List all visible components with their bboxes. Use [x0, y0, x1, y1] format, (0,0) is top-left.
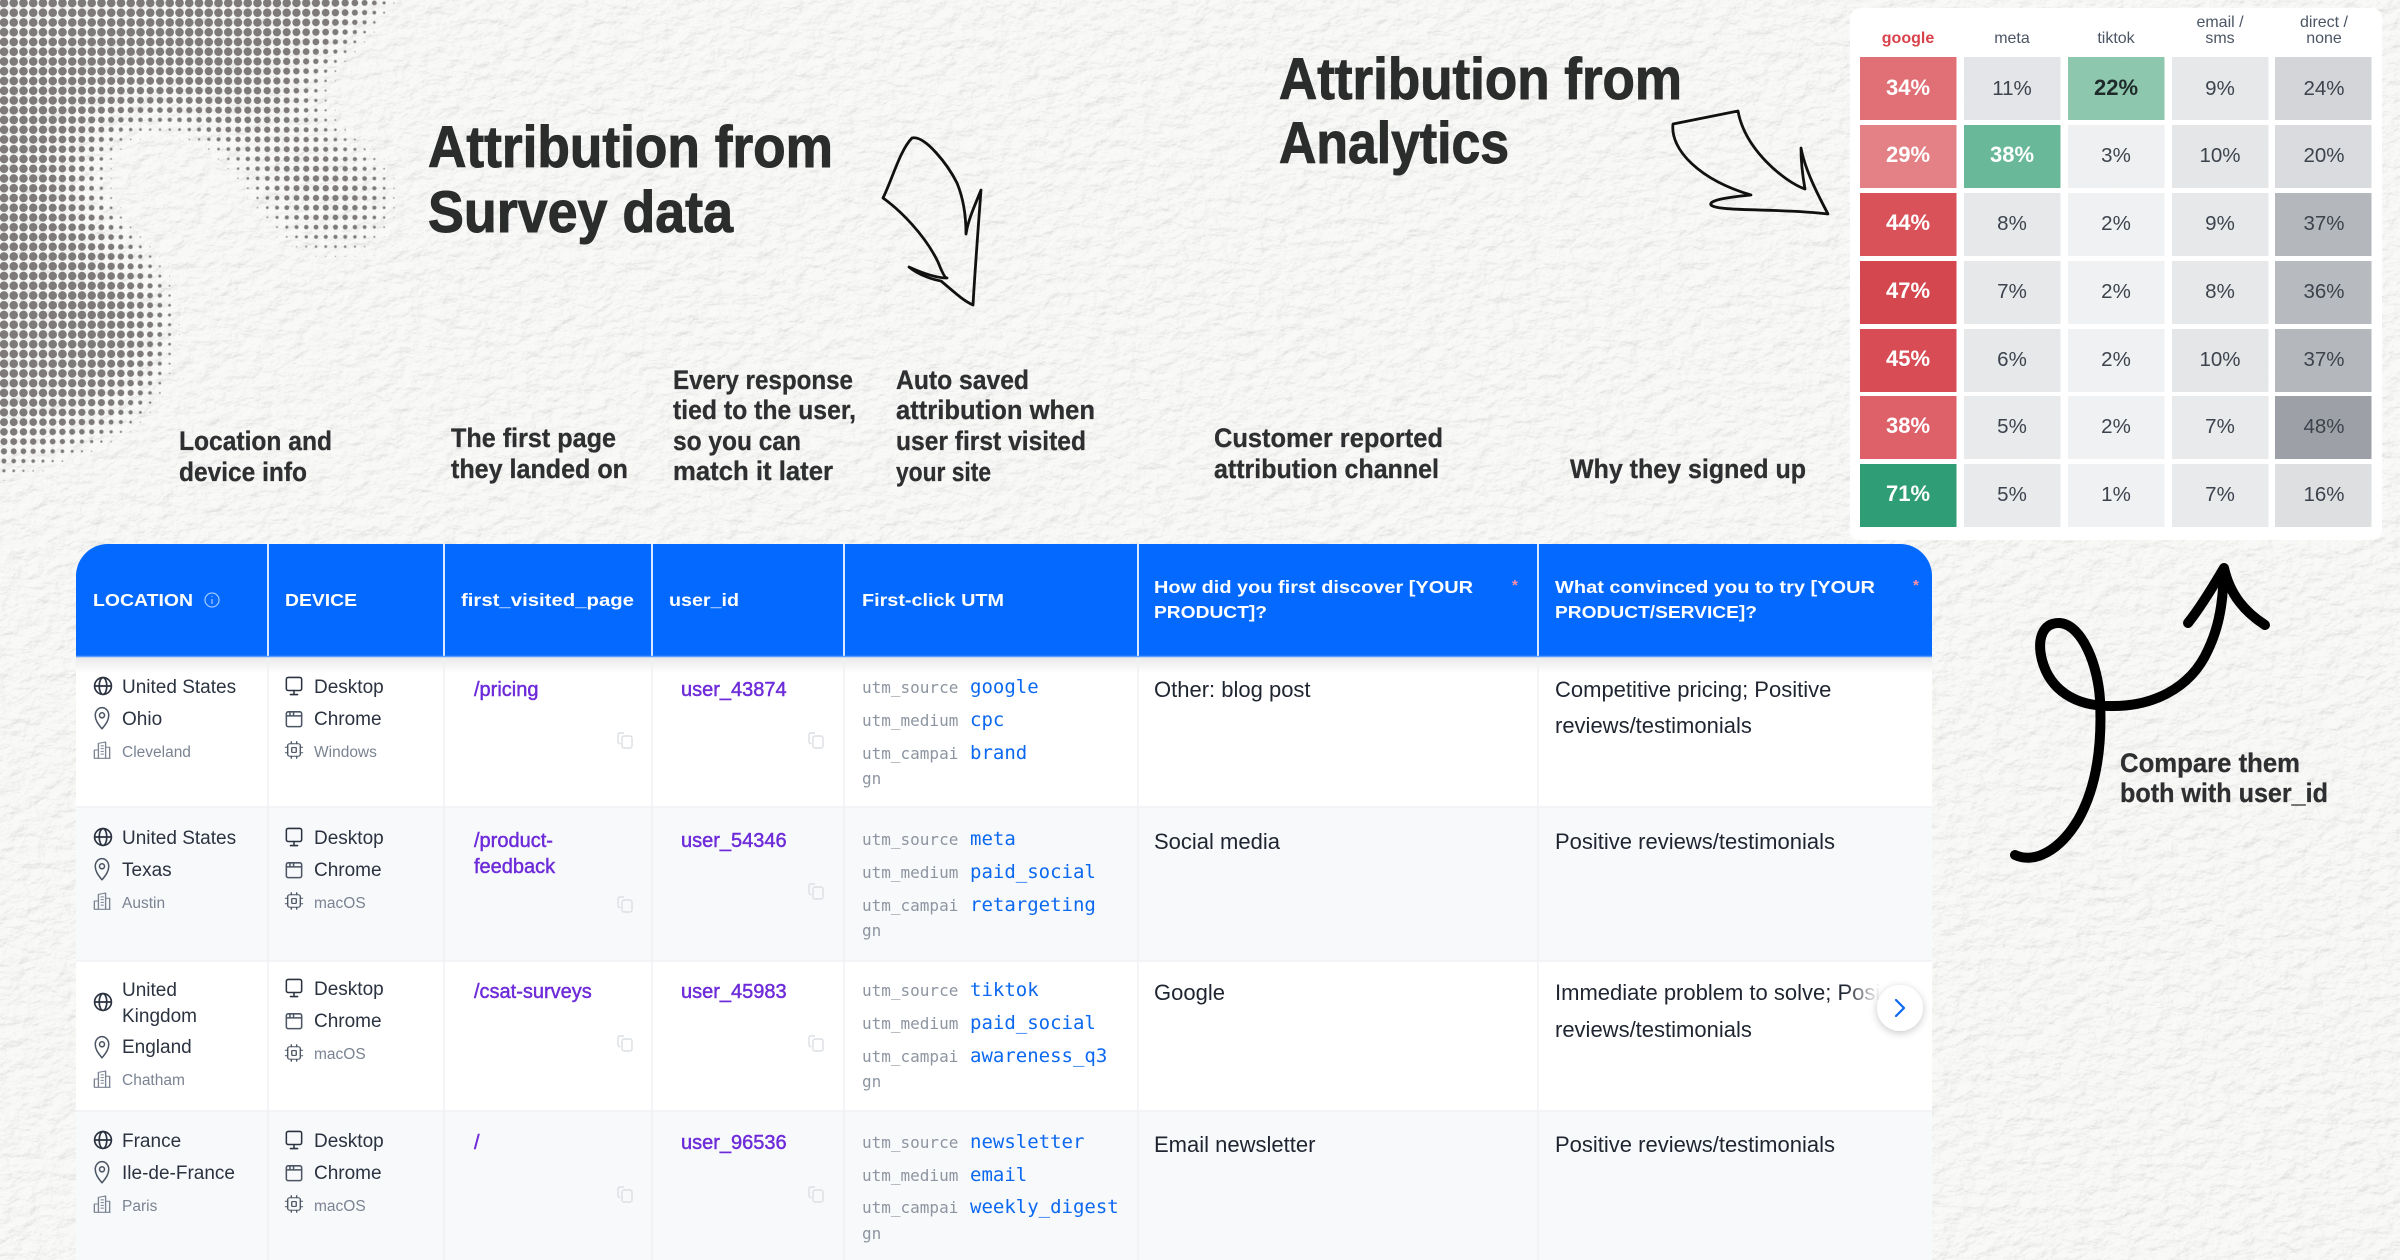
annotation: auto saved attribution: attribution when	[896, 395, 1095, 425]
location cell: Cleveland	[122, 744, 191, 761]
utm cell: awareness_q3	[970, 1045, 1107, 1067]
device cell: Desktop	[314, 979, 384, 1000]
icon: info	[205, 593, 219, 607]
survey answers	[1154, 677, 1831, 738]
location cell: Ohio	[122, 709, 162, 730]
title: Attribution from Survey data: Survey data	[428, 180, 734, 245]
panel: attribution heatmap	[1850, 8, 2382, 540]
location cell: Chatham	[122, 1072, 185, 1089]
location cell: Texas	[122, 860, 172, 881]
first visited page cell	[474, 830, 632, 912]
scroll button	[1846, 975, 1932, 1031]
location cell: Paris	[122, 1198, 158, 1215]
table header: first_visited_page	[461, 590, 634, 610]
utm cell: retargeting	[970, 894, 1096, 916]
utm cell: utm_source	[862, 830, 958, 849]
user id cell: user_45983	[681, 981, 787, 1003]
heatmap cells: 38%	[1886, 413, 1930, 438]
utm cell: utm_source	[862, 1133, 958, 1152]
annotation: user id: Every response	[673, 365, 853, 395]
table rows background	[76, 657, 1932, 1260]
title: Attribution from Analytics: Analytics	[1279, 111, 1509, 176]
user id cell	[681, 1132, 823, 1202]
survey answers	[1154, 829, 1835, 854]
annotation: user id: match it later	[673, 456, 833, 486]
utm cell	[862, 676, 1039, 788]
utm cell: utm_campai	[862, 744, 958, 763]
survey answers: Google	[1154, 980, 1225, 1005]
survey answers	[1154, 980, 1914, 1042]
survey answers: Social media	[1154, 829, 1281, 854]
utm cell: utm_campai	[862, 1198, 958, 1217]
utm cell: utm_campai	[862, 1047, 958, 1066]
device cell	[285, 828, 384, 912]
heatmap cells: 1%	[2101, 483, 2131, 506]
device cell: Desktop	[314, 828, 384, 849]
heatmap cells: 44%	[1886, 210, 1930, 235]
first visited page cell	[474, 981, 632, 1051]
utm cell: weekly_digest	[970, 1196, 1119, 1218]
location cell: Ile-de-France	[122, 1163, 235, 1184]
location cell	[94, 980, 197, 1089]
survey answers: Email newsletter	[1154, 1132, 1315, 1157]
device cell: macOS	[314, 1046, 366, 1063]
annotation: first page: The first page	[451, 423, 616, 453]
heatmap cells: 16%	[2303, 483, 2345, 506]
heatmap cells: 34%	[1886, 75, 1930, 100]
arrow: survey title to table	[883, 138, 981, 305]
survey answers: Other: blog post	[1154, 677, 1311, 702]
heatmap cells: 24%	[2303, 77, 2345, 100]
heatmap cells: 5%	[1997, 483, 2027, 506]
user id cell: user_96536	[681, 1132, 787, 1154]
heatmap column headers: google	[1882, 30, 1934, 47]
location cell: Kingdom	[122, 1006, 197, 1027]
table header: user_id	[669, 590, 739, 610]
heatmap cells: 5%	[1997, 415, 2027, 438]
table header: What convinced you to try [YOUR	[1555, 577, 1875, 597]
user id cell: user_43874	[681, 679, 787, 701]
utm cell: utm_medium	[862, 863, 958, 882]
annotation: location and device: Location and	[179, 426, 332, 456]
table header: DEVICE	[285, 590, 357, 610]
heatmap column headers: email /	[2196, 14, 2244, 31]
annotation: compare with user_id: Compare them	[2120, 748, 2300, 778]
device cell: Desktop	[314, 1131, 384, 1152]
heatmap cells: 9%	[2205, 77, 2235, 100]
utm cell: gn	[862, 1072, 881, 1091]
utm cell: tiktok	[970, 979, 1039, 1001]
first visited page cell: /product-	[474, 830, 553, 852]
column annotations	[179, 365, 1806, 487]
location cell: United	[122, 980, 177, 1001]
heatmap cells: 7%	[2205, 483, 2235, 506]
device cell: macOS	[314, 1198, 366, 1215]
heatmap cells: 2%	[2101, 348, 2131, 371]
location cell: England	[122, 1037, 192, 1058]
user id cell	[681, 679, 823, 748]
annotation: location and device: device info	[179, 457, 307, 487]
utm cell	[862, 979, 1107, 1091]
table header: *	[1512, 577, 1518, 594]
device cell: Windows	[314, 744, 377, 761]
utm cell: google	[970, 676, 1039, 698]
utm cell: meta	[970, 828, 1016, 850]
location cell: France	[122, 1131, 181, 1152]
heatmap cells: 37%	[2303, 348, 2345, 371]
annotation: customer reported: Customer reported	[1214, 423, 1443, 453]
annotation: auto saved attribution: your site	[896, 457, 991, 487]
location cell: United States	[122, 677, 236, 698]
heatmap column headers	[1882, 14, 2349, 47]
table header: PRODUCT]?	[1154, 602, 1267, 622]
annotation: user id: tied to the user,	[673, 395, 856, 425]
utm cell: cpc	[970, 709, 1004, 731]
heatmap cells: 22%	[2094, 75, 2138, 100]
device cell	[285, 677, 384, 761]
utm cell	[862, 1131, 1119, 1243]
annotation: compare with user_id: both with user_id	[2120, 778, 2328, 808]
heatmap column headers: none	[2306, 30, 2342, 47]
heatmap column headers: direct /	[2300, 14, 2349, 31]
title: Attribution from Analytics	[1279, 47, 1682, 176]
heatmap column headers: meta	[1994, 30, 2030, 47]
heatmap cells: 45%	[1886, 346, 1930, 371]
annotation: why they signed up: Why they signed up	[1570, 454, 1806, 484]
heatmap cells: 7%	[1997, 280, 2027, 303]
heatmap cells: 10%	[2199, 144, 2241, 167]
row 4	[94, 1131, 1835, 1243]
utm cell: utm_campai	[862, 896, 958, 915]
first visited page cell: /csat-surveys	[474, 981, 592, 1003]
annotation: auto saved attribution: Auto saved	[896, 365, 1029, 395]
utm cell: utm_source	[862, 981, 958, 1000]
device cell	[285, 1131, 384, 1215]
survey answers: Competitive pricing; Positive	[1555, 677, 1831, 702]
survey answers: Positive reviews/testimonials	[1555, 829, 1835, 854]
device cell: Desktop	[314, 677, 384, 698]
heatmap cells: 2%	[2101, 280, 2131, 303]
device cell	[285, 979, 384, 1063]
row 1	[94, 676, 1831, 788]
heatmap cells: 11%	[1992, 77, 2032, 100]
utm cell: brand	[970, 742, 1027, 764]
utm cell: email	[970, 1164, 1027, 1186]
heatmap cells: 71%	[1886, 481, 1930, 506]
location cell: Austin	[122, 895, 165, 912]
heatmap cells: 9%	[2205, 212, 2235, 235]
location cell	[94, 1131, 235, 1215]
first visited page cell: /pricing	[474, 679, 538, 701]
utm cell: utm_medium	[862, 711, 958, 730]
heatmap cells: 37%	[2303, 212, 2345, 235]
heatmap cells: 20%	[2303, 144, 2345, 167]
table header: First-click UTM	[862, 590, 1004, 610]
heatmap cells: 8%	[2205, 280, 2235, 303]
first visited page cell: feedback	[474, 856, 556, 878]
utm cell: gn	[862, 921, 881, 940]
heatmap cells: 48%	[2303, 415, 2345, 438]
device cell: Chrome	[314, 709, 382, 730]
heatmap column headers: sms	[2205, 30, 2235, 47]
heatmap cells: 38%	[1990, 142, 2034, 167]
survey answers: reviews/testimonials	[1555, 713, 1752, 738]
row 3	[94, 979, 1915, 1091]
annotation: customer reported: attribution channel	[1214, 454, 1439, 484]
heatmap cells	[1860, 57, 2372, 527]
annotation: first page: they landed on	[451, 454, 628, 484]
table header	[76, 544, 1932, 657]
table header: How did you first discover [YOUR	[1154, 577, 1473, 597]
device cell: Chrome	[314, 860, 382, 881]
heatmap cells: 8%	[1997, 212, 2027, 235]
arrow: analytics title to heatmap	[1673, 111, 1828, 214]
utm cell	[862, 828, 1096, 940]
first visited page cell	[474, 1132, 632, 1202]
survey answers: Immediate problem to solve; Positive	[1555, 980, 1914, 1005]
utm cell: newsletter	[970, 1131, 1084, 1153]
table header: LOCATION	[93, 590, 193, 610]
row 2	[94, 828, 1835, 940]
heatmap column headers: tiktok	[2097, 30, 2136, 47]
heatmap cells: 2%	[2101, 212, 2131, 235]
utm cell: utm_medium	[862, 1166, 958, 1185]
title: Attribution from Survey data	[428, 115, 833, 245]
arrow: compare loop to heatmap	[2015, 568, 2265, 858]
title: Attribution from Analytics: Attribution from	[1279, 47, 1682, 112]
first visited page cell: /	[474, 1132, 480, 1154]
halftone dot pattern	[0, 0, 430, 490]
device cell: Chrome	[314, 1011, 382, 1032]
user id cell: user_54346	[681, 830, 787, 852]
location cell	[94, 828, 236, 912]
heatmap cells: 3%	[2101, 144, 2131, 167]
user id cell	[681, 981, 823, 1051]
heatmap cells: 10%	[2199, 348, 2241, 371]
annotation: compare with user_id	[2120, 748, 2328, 808]
heatmap cells: 47%	[1886, 278, 1930, 303]
annotation: auto saved attribution: user first visited	[896, 426, 1086, 456]
table header: PRODUCT/SERVICE]?	[1555, 602, 1757, 622]
location cell: United States	[122, 828, 236, 849]
heatmap cells: 2%	[2101, 415, 2131, 438]
survey answers: reviews/testimonials	[1555, 1017, 1752, 1042]
annotation: user id: so you can	[673, 426, 801, 456]
location cell	[94, 677, 236, 761]
device cell: Chrome	[314, 1163, 382, 1184]
utm cell: utm_medium	[862, 1014, 958, 1033]
utm cell: gn	[862, 769, 881, 788]
heatmap cells: 36%	[2303, 280, 2345, 303]
table header: *	[1913, 577, 1919, 594]
survey answers: Positive reviews/testimonials	[1555, 1132, 1835, 1157]
panel: survey responses table	[76, 544, 1932, 1260]
heatmap cells: 6%	[1997, 348, 2027, 371]
survey answers	[1154, 1132, 1835, 1157]
heatmap cells: 29%	[1886, 142, 1930, 167]
utm cell: paid_social	[970, 861, 1096, 883]
device cell: macOS	[314, 895, 366, 912]
first visited page cell	[474, 679, 632, 748]
heatmap cells: 7%	[2205, 415, 2235, 438]
title: Attribution from Survey data: Attribution from	[428, 115, 833, 180]
utm cell: utm_source	[862, 678, 958, 697]
utm cell: gn	[862, 1224, 881, 1243]
user id cell	[681, 830, 823, 899]
utm cell: paid_social	[970, 1012, 1096, 1034]
